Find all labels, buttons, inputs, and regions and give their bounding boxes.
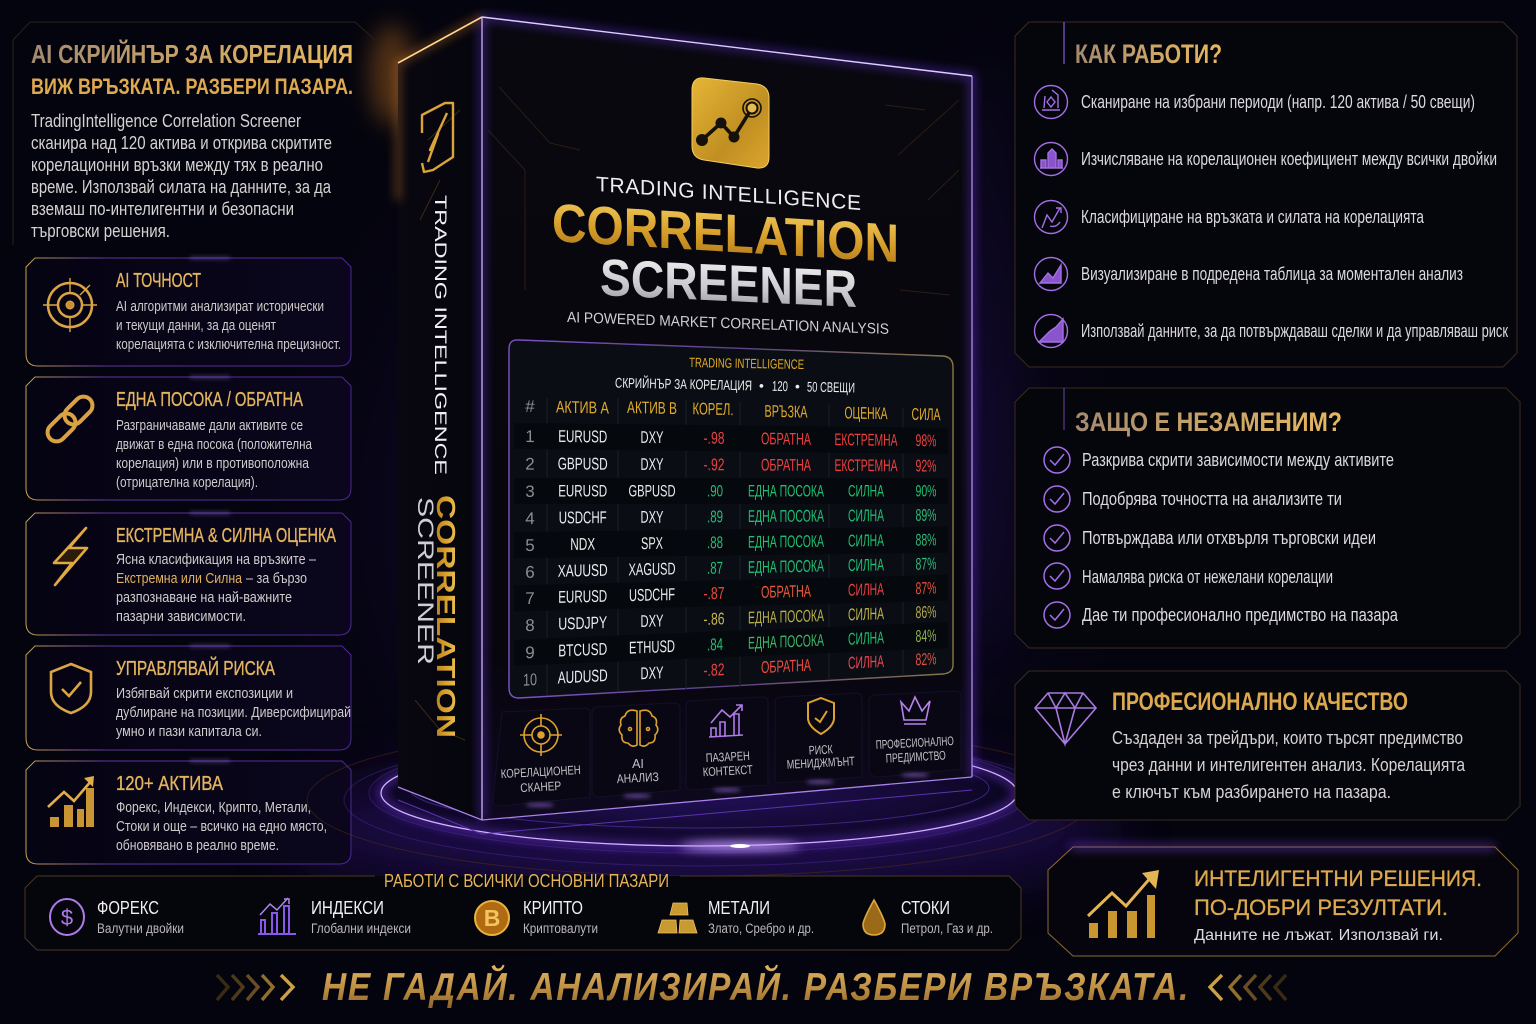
icon: bitcoin: B xyxy=(484,905,500,931)
row 1: 98% xyxy=(916,431,937,450)
table subtitle: • xyxy=(759,378,764,394)
row 10: -.82 xyxy=(704,660,724,680)
table subtitle: СКРИЙНЪР ЗА КОРЕЛАЦИЯ xyxy=(615,373,752,393)
row 4: .89 xyxy=(707,507,723,526)
row 2: 92% xyxy=(915,456,936,476)
row 5: 5 xyxy=(525,536,535,555)
heading: КАК РАБОТИ? xyxy=(1075,39,1222,69)
row 6: 87% xyxy=(915,554,936,574)
row 2 xyxy=(525,454,936,476)
table header: СИЛА xyxy=(912,405,941,424)
text xyxy=(116,799,327,854)
row 10 xyxy=(523,649,937,690)
subheading: ВИЖ ВРЪЗКАТА. РАЗБЕРИ ПАЗАРА. xyxy=(31,74,353,99)
row 5: ЕДНА ПОСОКА xyxy=(748,532,824,552)
intro text xyxy=(31,111,332,241)
row 7: USDCHF xyxy=(629,585,675,605)
feature tile: scanner: СКАНЕР xyxy=(520,779,562,795)
icon: growth chart xyxy=(1088,870,1159,938)
spine correlation: CORRELATION xyxy=(431,495,461,738)
row 8: 86% xyxy=(916,602,936,622)
row 2: ОБРАТНА xyxy=(761,456,811,475)
row 4: 89% xyxy=(916,506,936,525)
market: metals xyxy=(658,898,814,936)
title: 120+ АКТИВА xyxy=(116,773,224,795)
row 6: XAGUSD xyxy=(628,559,675,579)
market: commodities: СТОКИ xyxy=(901,898,950,918)
icon: brain xyxy=(619,710,658,746)
heading: ЗАЩО Е НЕЗАМЕНИМ? xyxy=(1075,407,1342,437)
intro text: време. Използвай силата на данните, за да xyxy=(31,177,332,197)
label: РИСК xyxy=(808,742,834,758)
market: commodities xyxy=(863,898,993,936)
heading: AI СКРИЙНЪР ЗА КОРЕЛАЦИЯ xyxy=(31,39,353,69)
step 4 xyxy=(1034,258,1463,290)
intro text: търговски решения. xyxy=(31,221,170,241)
benefit 5 xyxy=(1044,602,1399,628)
label: AI xyxy=(632,757,644,771)
row 8: СИЛНА xyxy=(848,604,884,624)
text: дублиране на позиции. Диверсифицирай xyxy=(116,704,351,721)
market: crypto: КРИПТО xyxy=(523,898,583,918)
table subtitle: 50 СВЕЩИ xyxy=(807,379,855,396)
icon: trend line xyxy=(696,99,761,146)
row 5: 88% xyxy=(915,530,936,550)
icon: gold shield xyxy=(808,698,834,734)
text: е ключът към разбирането на пазара. xyxy=(1112,781,1391,802)
benefit 3 xyxy=(1044,525,1376,551)
market: indices: Глобални индекси xyxy=(311,921,411,936)
table header: # xyxy=(525,397,535,416)
icon: oil drop xyxy=(863,900,885,935)
table panel xyxy=(509,340,953,698)
row 10: 10 xyxy=(523,670,537,690)
table header: ВРЪЗКА xyxy=(764,402,808,422)
row 1: DXY xyxy=(640,428,663,447)
step 2 xyxy=(1034,142,1497,176)
text: Стоки и още – всичко на едно място, xyxy=(116,818,327,835)
text xyxy=(116,685,351,740)
benefit 2 xyxy=(1044,486,1342,512)
text: корелация) или в противоположна xyxy=(116,455,310,472)
row 1: 1 xyxy=(525,427,535,446)
label: КОРЕЛАЦИОНЕН xyxy=(500,763,581,781)
icon: target xyxy=(43,278,97,332)
icon: index chart xyxy=(258,898,296,934)
row 4: DXY xyxy=(640,508,663,527)
table column dividers xyxy=(547,398,903,695)
row 10: ОБРАТНА xyxy=(761,656,811,677)
step 1 xyxy=(1034,86,1475,118)
row 7: -.87 xyxy=(703,584,724,603)
intro text: TradingIntelligence Correlation Screener xyxy=(31,111,301,131)
row 4: 4 xyxy=(525,509,535,528)
label: ПАЗАРЕН xyxy=(705,749,750,765)
row 6: 6 xyxy=(525,563,535,582)
row 2: GBPUSD xyxy=(558,454,608,474)
title: correlation: CORRELATION xyxy=(552,193,899,274)
row 10: СИЛНА xyxy=(848,652,884,673)
box front face xyxy=(482,17,972,820)
card: risk xyxy=(26,646,351,750)
market: indices xyxy=(258,898,411,936)
panel: smart decisions: ПО-ДОБРИ РЕЗУЛТАТИ. xyxy=(1194,895,1448,920)
row 9: СИЛНА xyxy=(848,628,884,649)
row 6: XAUUSD xyxy=(558,561,608,581)
row 10: DXY xyxy=(641,663,664,683)
feature tile: edge: ПРЕДИМСТВО xyxy=(885,748,946,766)
text: умно и пази капитала си. xyxy=(116,723,262,740)
table subtitle: • xyxy=(795,378,800,394)
row 5 xyxy=(514,527,948,558)
icon: dollar: $ xyxy=(61,905,73,930)
title: AI ТОЧНОСТ xyxy=(116,270,201,292)
market: crypto: Криптовалути xyxy=(523,921,598,936)
benefit 4 xyxy=(1044,563,1333,589)
row 2: -.92 xyxy=(704,455,725,474)
spine title: TRADING INTELLIGENCE xyxy=(431,195,450,475)
benefit 5: Дае ти професионално предимство на пазара xyxy=(1082,605,1399,625)
slogan xyxy=(217,964,1286,1009)
benefit 2: Подобрява точността на анализите ти xyxy=(1082,489,1342,509)
row 6: ЕДНА ПОСОКА xyxy=(748,556,824,577)
market: metals: Злато, Сребро и др. xyxy=(708,921,814,936)
row 7: 7 xyxy=(525,589,535,608)
feature tile: risk xyxy=(775,693,862,783)
table header: АКТИВ В xyxy=(627,398,677,418)
panel: professional quality xyxy=(1015,671,1520,820)
row 6: .87 xyxy=(707,558,723,578)
text xyxy=(1112,727,1466,802)
row 8 xyxy=(525,602,936,635)
text: (отрицателна корелация). xyxy=(116,474,258,491)
logo tile xyxy=(692,78,769,168)
row 3: EURUSD xyxy=(558,482,607,500)
heading: ПРОФЕСИОНАЛНО КАЧЕСТВО xyxy=(1112,688,1408,716)
panel: smart decisions xyxy=(1048,847,1518,956)
text: разпознаване на най-важните xyxy=(116,589,292,606)
row 9: BTCUSD xyxy=(558,640,607,660)
title: screener: SCREENER xyxy=(600,249,857,319)
row 9: ЕДНА ПОСОКА xyxy=(748,631,824,653)
step 5 xyxy=(1034,314,1508,348)
row 5: SPX xyxy=(641,534,663,553)
product box xyxy=(398,17,972,834)
icon: crown xyxy=(901,697,930,724)
icon: bar chart xyxy=(48,776,94,827)
text: – за бързо xyxy=(246,570,307,587)
intro text: вземаш по-интелигентни и безопасни xyxy=(31,199,294,219)
benefit 4: Намалява риска от нежелани корелации xyxy=(1082,567,1333,587)
title: ЕКСТРЕМНА & СИЛНА ОЦЕНКА xyxy=(116,525,336,547)
row 7: 87% xyxy=(916,579,936,598)
icon: lightning bolt xyxy=(54,528,87,585)
icon: purple chart xyxy=(709,705,743,737)
box edges xyxy=(398,17,972,834)
text: Форекс, Индекси, Крипто, Метали, xyxy=(116,799,311,816)
panel: intro xyxy=(13,22,375,245)
row 8: DXY xyxy=(640,611,663,631)
text: чрез данни и интелигентен анализ. Корелацията xyxy=(1112,754,1466,775)
intro text: сканира над 120 актива и открива скритите xyxy=(31,133,332,153)
card: assets xyxy=(26,760,351,864)
row 5: СИЛНА xyxy=(848,531,884,550)
title: ЕДНА ПОСОКА / ОБРАТНА xyxy=(116,389,303,411)
row 2: DXY xyxy=(640,455,663,474)
platform xyxy=(307,724,1091,876)
row 3: СИЛНА xyxy=(848,482,884,500)
row 8: 8 xyxy=(525,616,535,635)
row 1: -.98 xyxy=(704,429,725,448)
text: AI алгоритми анализират исторически xyxy=(116,298,324,315)
row 9: 9 xyxy=(525,643,535,662)
table header xyxy=(525,396,941,424)
row 6 xyxy=(525,554,936,582)
text xyxy=(116,298,341,353)
row 7 xyxy=(514,575,948,611)
text xyxy=(116,551,317,625)
spine logo xyxy=(422,103,453,172)
label: ПРОФЕСИОНАЛНО xyxy=(875,734,954,752)
icon: shield xyxy=(51,664,91,713)
row 4: USDCHF xyxy=(559,508,607,527)
market: forex: ФОРЕКС xyxy=(97,898,159,918)
row 9: .84 xyxy=(707,635,723,654)
table header: КОРЕЛ. xyxy=(692,399,734,419)
row 6: СИЛНА xyxy=(848,555,884,575)
market: forex: Валутни двойки xyxy=(97,921,184,936)
table title: TRADING INTELLIGENCE xyxy=(689,355,804,372)
box left face xyxy=(398,17,482,820)
tagline: AI POWERED MARKET CORRELATION ANALYSIS xyxy=(567,309,889,338)
arrows left xyxy=(217,975,293,1000)
row 4: СИЛНА xyxy=(848,506,884,525)
row 3: .90 xyxy=(707,482,723,500)
text xyxy=(116,417,313,491)
row 8: USDJPY xyxy=(558,613,607,634)
text: Създаден за трейдъри, които търсят предимство xyxy=(1112,727,1463,748)
text: Данните не лъжат. Използвай ги. xyxy=(1194,927,1443,944)
heading: ИНТЕЛИГЕНТНИ РЕШЕНИЯ. xyxy=(1194,866,1482,891)
feature tile: edge xyxy=(869,691,961,777)
benefit 1 xyxy=(1044,447,1394,473)
step 3: Класифициране на връзката и силата на корелацията xyxy=(1081,207,1425,227)
row 4 xyxy=(525,506,936,528)
market: metals: МЕТАЛИ xyxy=(708,898,770,918)
row 3: GBPUSD xyxy=(628,482,676,500)
feature tile: context: КОНТЕКСТ xyxy=(702,763,753,779)
benefit 3: Потвърждава или отхвърля търговски идеи xyxy=(1082,528,1376,548)
row 1: EURUSD xyxy=(558,427,607,446)
text: Ясна класификация на връзките – xyxy=(116,551,317,568)
icon: gold bars xyxy=(658,903,697,933)
spine screener: SCREENER xyxy=(413,497,438,665)
text: и текущи данни, за да оценят xyxy=(116,317,276,334)
panel: why irreplaceable xyxy=(1015,388,1520,648)
row 4: ЕДНА ПОСОКА xyxy=(748,507,824,526)
row 1: ОБРАТНА xyxy=(761,429,811,449)
text: Избягвай скрити експозиции и xyxy=(116,685,293,702)
row 5: .88 xyxy=(707,533,723,552)
row 8: -.86 xyxy=(704,609,724,629)
text: Разграничаваме дали активите се xyxy=(116,417,303,434)
panel: markets xyxy=(25,871,1021,950)
row 3 xyxy=(514,478,948,504)
benefit 1: Разкрива скрити зависимости между активите xyxy=(1082,450,1394,470)
row 9: ETHUSD xyxy=(629,637,675,658)
feature tile: risk: МЕНИДЖМЪНТ xyxy=(786,754,855,772)
brand line: TRADING INTELLIGENCE xyxy=(596,173,861,215)
row 10: AUDUSD xyxy=(558,666,608,687)
text: обновявано в реално време. xyxy=(116,837,279,854)
feature tile: AI: АНАЛИЗ xyxy=(616,770,659,786)
row 3: 90% xyxy=(916,482,936,500)
card: AI accuracy xyxy=(26,258,351,366)
text: корелацията с изключителна прецизност. xyxy=(116,336,341,353)
row 5: NDX xyxy=(570,535,595,554)
card: rating xyxy=(26,512,351,635)
title: УПРАВЛЯВАЙ РИСКА xyxy=(116,656,276,680)
table header: АКТИВ А xyxy=(556,398,609,418)
step 3 xyxy=(1034,200,1425,234)
text: Екстремна или Силна xyxy=(116,570,243,587)
table header: ОЦЕНКА xyxy=(844,403,888,423)
row 9: 84% xyxy=(916,626,936,646)
row 3: ЕДНА ПОСОКА xyxy=(748,482,824,500)
row 7: EURUSD xyxy=(558,587,607,607)
table subtitle: 120 xyxy=(772,378,788,394)
market: forex xyxy=(50,898,184,936)
feature tile: context xyxy=(686,697,768,791)
market: commodities: Петрол, Газ и др. xyxy=(901,921,993,936)
market: indices: ИНДЕКСИ xyxy=(311,898,384,918)
card: direction xyxy=(26,376,351,500)
text: движат в една посока (положителна xyxy=(116,436,313,453)
market: crypto xyxy=(475,898,598,936)
row 7: СИЛНА xyxy=(848,580,884,600)
slogan text: НЕ ГАДАЙ. АНАЛИЗИРАЙ. РАЗБЕРИ ВРЪЗКАТА. xyxy=(322,964,1190,1009)
icon: scanner target xyxy=(520,714,562,756)
text: пазарни зависимости. xyxy=(116,608,246,625)
row 2: 2 xyxy=(525,455,535,474)
row 8: ЕДНА ПОСОКА xyxy=(748,606,824,628)
arrows right xyxy=(1210,975,1286,1000)
row 9 xyxy=(514,622,948,666)
row 1 xyxy=(514,423,948,454)
row 1: ЕКСТРЕМНА xyxy=(834,430,898,450)
feature tile: scanner xyxy=(493,708,590,806)
row 3: 3 xyxy=(525,482,535,501)
feature tile: AI xyxy=(592,703,680,797)
icon: diamond xyxy=(1035,693,1096,744)
panel: how it works xyxy=(1015,22,1517,367)
row 7: ОБРАТНА xyxy=(761,582,811,602)
icon: chain link xyxy=(44,393,96,445)
intro text: корелационни връзки между тях в реално xyxy=(31,155,323,175)
row 10: 82% xyxy=(916,649,937,669)
heading: РАБОТИ С ВСИЧКИ ОСНОВНИ ПАЗАРИ xyxy=(384,871,669,891)
row 2: ЕКСТРЕМНА xyxy=(834,456,898,475)
